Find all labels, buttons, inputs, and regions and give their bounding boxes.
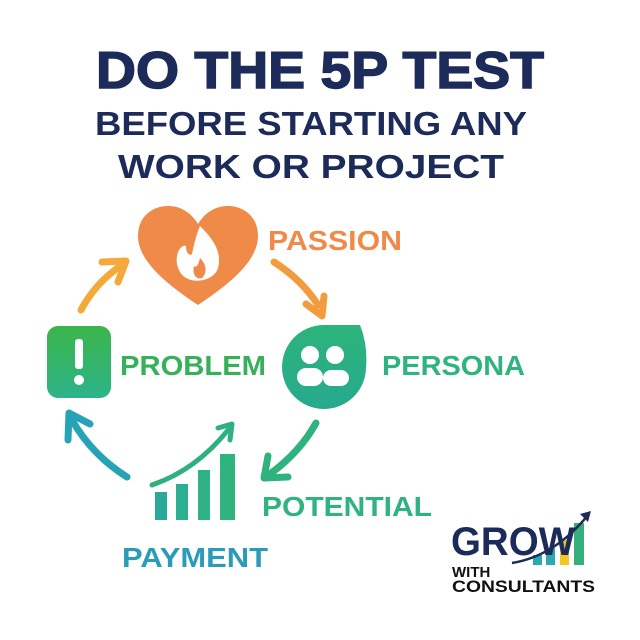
label: payment: PAYMENT xyxy=(122,542,268,573)
arrow: payment to problem xyxy=(68,413,127,477)
arrow: persona to potential xyxy=(264,423,316,478)
label: potential: POTENTIAL xyxy=(262,491,432,522)
logo: CONSULTANTS xyxy=(452,577,595,596)
label: problem: PROBLEM xyxy=(120,350,266,381)
title: DO THE 5P TEST xyxy=(96,42,544,100)
icon: problem xyxy=(47,326,111,398)
icon: growth chart xyxy=(152,424,235,520)
logo: WITH xyxy=(452,564,490,581)
logo: GROW xyxy=(451,520,575,564)
icon: heart with flame xyxy=(138,206,258,305)
arrow: passion to persona xyxy=(274,262,324,316)
subtitle: BEFORE STARTING ANY xyxy=(95,105,527,142)
arrow: problem to passion xyxy=(81,261,126,310)
logo xyxy=(451,511,595,596)
icon: persona xyxy=(282,325,366,409)
label: persona: PERSONA xyxy=(382,350,525,381)
subtitle xyxy=(95,105,527,185)
label: passion: PASSION xyxy=(268,225,402,256)
subtitle: WORK OR PROJECT xyxy=(118,148,504,185)
